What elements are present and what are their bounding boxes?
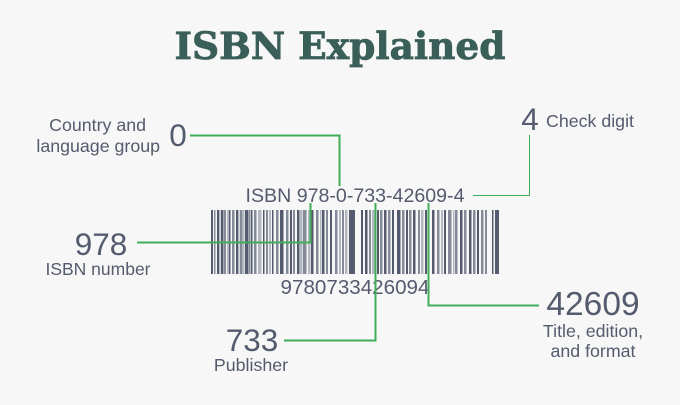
ISBN code text: ISBN 978-0-733-42609-4 (246, 185, 464, 207)
digit: 4: 4 (521, 101, 539, 137)
connector: country group (190, 136, 340, 186)
connector: publisher (284, 203, 376, 340)
digit: 733: 733 (226, 322, 278, 358)
connector: ISBN number (137, 203, 310, 242)
label: title, edition, format: and format (550, 341, 636, 361)
digit: 0: 0 (169, 117, 187, 153)
label: country: language group (36, 136, 160, 156)
connector: check digit (473, 135, 530, 196)
connector: title (428, 203, 539, 306)
label: title, edition, format: Title, edition, (543, 321, 643, 341)
label: ISBN number: ISBN number (45, 259, 151, 279)
label: country: Country and (49, 115, 146, 135)
label: check digit: Check digit (546, 111, 634, 131)
title: ISBN Explained (175, 24, 505, 68)
label: title, edition, format (543, 321, 643, 361)
digit: 42609: 42609 (546, 286, 640, 323)
label: publisher: Publisher (214, 355, 288, 375)
barcode number: 9780733426094 (281, 276, 429, 299)
label: country (36, 115, 160, 156)
digit: 978: 978 (75, 226, 127, 262)
